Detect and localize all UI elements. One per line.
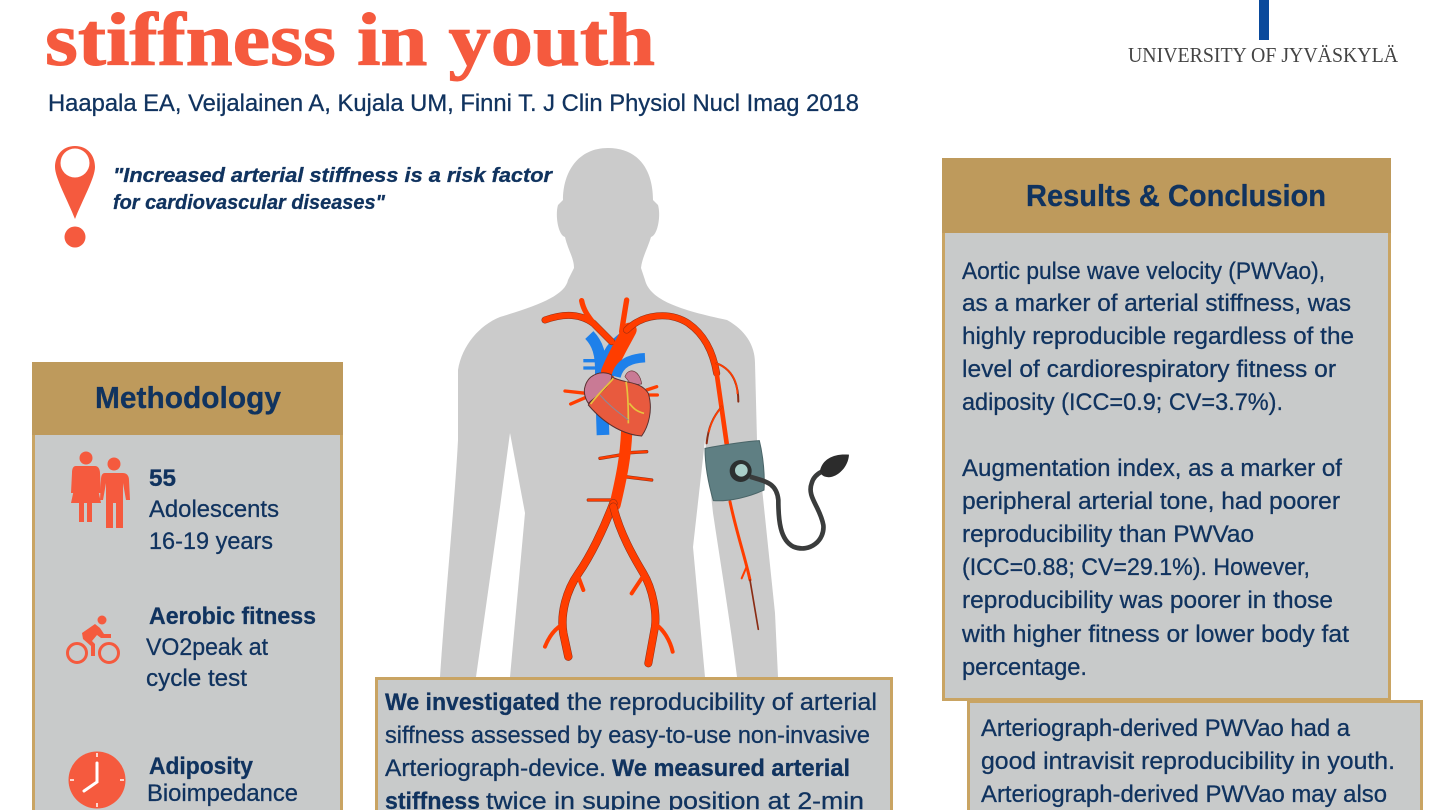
participants text bbox=[149, 465, 279, 555]
methodology heading bbox=[32, 362, 343, 435]
citation: Haapala EA, Veijalainen A, Kujala UM, Finni T. J Clin Physiol Nucl Imag 2018 bbox=[48, 90, 859, 117]
university logo bbox=[1128, 0, 1399, 67]
university logo: UNIVERSITY OF JYVÄSKYLÄ bbox=[1128, 43, 1399, 67]
results text: augmentation index: with higher fitness or lower body fat bbox=[961, 621, 1349, 648]
callout: conclusion: Arteriograph-derived PWVao had a bbox=[981, 715, 1351, 742]
icon: people bbox=[71, 452, 130, 528]
results text: PWVao: level of cardiorespiratory fitness or bbox=[962, 356, 1336, 383]
results text: augmentation index: Augmentation index, as a marker of bbox=[962, 455, 1342, 482]
results text: augmentation index: peripheral arterial tone, had poorer bbox=[962, 488, 1340, 515]
panel: methodology bbox=[32, 362, 343, 810]
panel: study description: the reproducibility of arterial bbox=[567, 689, 877, 716]
results text: PWVao: highly reproducible regardless of the bbox=[962, 323, 1354, 350]
icon: warning pin bbox=[55, 146, 95, 248]
aerobic fitness text: VO2peak at bbox=[146, 634, 268, 661]
participants text: 16-19 years bbox=[149, 528, 273, 555]
aerobic fitness text bbox=[146, 603, 316, 692]
panel: study description: siffness assessed by easy-to-use non-invasive bbox=[385, 722, 870, 749]
risk statement bbox=[113, 165, 553, 214]
panel: study description: Arteriograph-device. bbox=[385, 755, 606, 782]
results text: augmentation index: reproducibility was poorer in those bbox=[962, 587, 1333, 614]
results text: augmentation index: percentage. bbox=[962, 654, 1087, 681]
risk statement: for cardiovascular diseases" bbox=[113, 192, 386, 214]
arteries and heart bbox=[545, 300, 758, 663]
results text: augmentation index bbox=[961, 455, 1349, 681]
risk statement: "Increased arterial stiffness is a risk factor bbox=[113, 165, 553, 187]
adiposity text bbox=[147, 753, 298, 807]
adiposity text: Bioimpedance bbox=[147, 780, 298, 807]
adiposity text: Adiposity bbox=[149, 753, 254, 780]
panel: results and conclusion bbox=[942, 158, 1391, 700]
results text: augmentation index: reproducibility than PWVao bbox=[962, 521, 1254, 548]
title: stiffness in youth bbox=[45, 0, 655, 82]
results text: PWVao: as a marker of arterial stiffness, was bbox=[962, 290, 1351, 317]
results text: PWVao bbox=[962, 258, 1354, 416]
body illustration bbox=[440, 148, 849, 690]
results text: PWVao: Aortic pulse wave velocity (PWVao), bbox=[962, 258, 1325, 285]
panel: study description: We measured arterial bbox=[612, 755, 850, 782]
aerobic fitness text: cycle test bbox=[146, 665, 247, 692]
results text: PWVao: adiposity (ICC=0.9; CV=3.7%). bbox=[962, 389, 1283, 416]
callout: conclusion bbox=[968, 702, 1422, 810]
aerobic fitness text: Aerobic fitness bbox=[149, 603, 316, 630]
participants text: Adolescents bbox=[149, 496, 279, 523]
callout: conclusion: good intravisit reproducibility in youth. bbox=[981, 748, 1395, 775]
body silhouette bbox=[440, 148, 778, 690]
icon: cyclist bbox=[68, 616, 118, 662]
methodology heading: Methodology bbox=[95, 380, 282, 415]
panel: study description bbox=[376, 678, 892, 810]
results text: augmentation index: (ICC=0.88; CV=29.1%). However, bbox=[962, 554, 1310, 581]
panel: study description: We investigated bbox=[385, 689, 560, 716]
participants text: 55 bbox=[149, 465, 176, 492]
icon: clock bbox=[68, 752, 126, 808]
blood pressure cuff bbox=[705, 441, 849, 548]
callout: conclusion: Arteriograph-derived PWVao may also bbox=[981, 781, 1387, 808]
results heading: Results & Conclusion bbox=[1026, 178, 1326, 213]
results heading bbox=[942, 158, 1391, 233]
